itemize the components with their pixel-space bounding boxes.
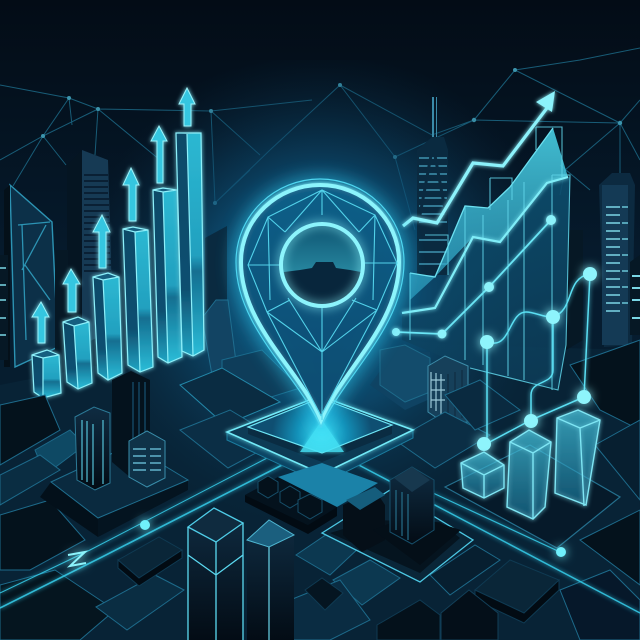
connector lines bbox=[484, 274, 590, 445]
chart dark glass body bbox=[402, 177, 570, 390]
dark blocks foreground bbox=[118, 537, 559, 640]
chart bright fill bbox=[410, 128, 568, 300]
middle chart line bbox=[402, 177, 568, 313]
bar 5 bbox=[153, 188, 182, 363]
bar 1 bbox=[32, 350, 61, 398]
upper chart line bbox=[403, 108, 547, 226]
pin facets bbox=[248, 190, 397, 420]
midground blocks beside pin bbox=[180, 345, 468, 425]
inner lens bbox=[283, 226, 361, 304]
pin outer thin line bbox=[236, 179, 404, 427]
right skyscrapers bbox=[417, 97, 640, 350]
left edge building bbox=[0, 255, 8, 360]
tall dark building bbox=[112, 371, 150, 478]
glowing circuit roads bbox=[0, 457, 640, 613]
spire tower bbox=[432, 97, 437, 137]
bar 6 bbox=[176, 133, 204, 356]
ground tiles bbox=[0, 340, 640, 640]
ground plane bbox=[0, 330, 640, 640]
location pin with base bbox=[227, 179, 413, 484]
skyline in lens bbox=[284, 262, 361, 304]
bar 3 bbox=[93, 273, 122, 380]
tower faceted bbox=[10, 185, 58, 367]
bar 2 bbox=[63, 317, 92, 389]
glowing nodes bbox=[477, 267, 597, 451]
glass cube tall bbox=[555, 410, 600, 506]
pin halo bbox=[60, 60, 580, 530]
pin inner ring bbox=[281, 224, 363, 306]
pin body bbox=[241, 185, 399, 420]
glass area chart with rising arrow bbox=[392, 91, 570, 390]
centre-right foreground building bbox=[322, 467, 473, 582]
centre foreground platform with cubes bbox=[245, 463, 378, 534]
platform bbox=[40, 482, 98, 537]
glass cube small bbox=[461, 452, 504, 498]
arrow head bbox=[536, 91, 555, 112]
platform under cubes bbox=[445, 445, 620, 548]
glass cube medium bbox=[507, 430, 551, 519]
striped building bbox=[75, 407, 110, 490]
tower B bbox=[247, 520, 294, 640]
far dark skyscrapers left bbox=[0, 150, 240, 393]
area top line bbox=[410, 128, 553, 277]
left foreground buildings on platform bbox=[40, 371, 188, 537]
network lines in sky bbox=[0, 48, 640, 230]
tower tall bbox=[67, 150, 82, 345]
glass columns bbox=[410, 127, 570, 390]
pin glow bbox=[241, 185, 399, 420]
tower C bbox=[441, 590, 498, 640]
rising glowing bars with arrows bbox=[32, 88, 204, 398]
dark mass bbox=[566, 230, 583, 350]
foreground towers bbox=[188, 508, 498, 640]
window building bbox=[129, 431, 165, 487]
glowing road nodes bbox=[68, 520, 566, 566]
pin base plate bbox=[227, 396, 413, 484]
tower far right of bars bbox=[205, 226, 227, 340]
connected nodes and glass cubes bbox=[445, 267, 620, 548]
chart nodes bbox=[392, 215, 556, 338]
arrows bbox=[32, 88, 195, 343]
right edge tower bbox=[630, 255, 640, 335]
right tall tower bbox=[599, 173, 635, 347]
tower A bbox=[188, 508, 243, 640]
bar 4 bbox=[123, 227, 153, 372]
node line bbox=[396, 220, 551, 334]
